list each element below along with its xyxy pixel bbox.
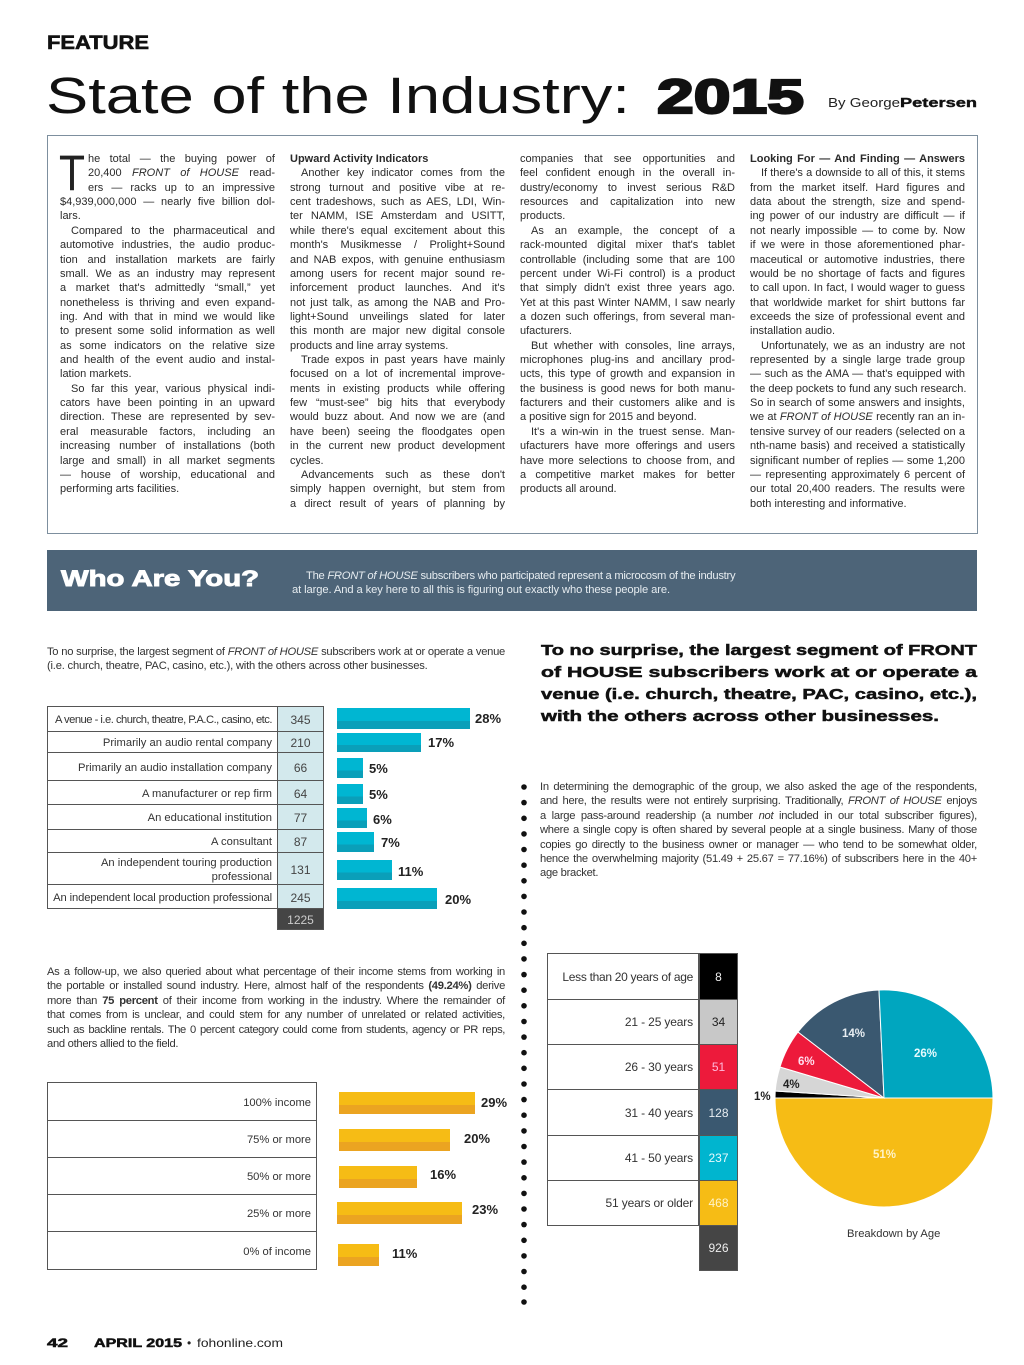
article column 3: products. xyxy=(520,210,565,222)
article column 2: Trade expos in past years have mainly xyxy=(301,354,505,366)
table: subscriber segments: 131 xyxy=(290,862,311,876)
article column 3 xyxy=(520,153,735,495)
article column 3: feel confident enough in the overall in- xyxy=(520,167,735,179)
text: income follow-up: more than 75 percent of their income from working in the industry. Where the remainder of xyxy=(47,995,505,1007)
article column 2: this month are major new digital console xyxy=(290,325,505,337)
table: age: 21 - 25 years xyxy=(625,1015,693,1029)
article column 3: Yet at this past Winter NAMM, I saw nearly xyxy=(520,297,735,309)
pull quote: of HOUSE subscribers work at or operate a xyxy=(541,664,978,681)
article column 2: ter NAMM, ISE Amsterdam and USITT, xyxy=(290,210,505,222)
article column 4: the deep pockets to fund any such research. xyxy=(750,383,966,395)
article column 3: rack-mounted digital mixer that's tablet xyxy=(520,239,735,251)
table: income: 75% or more xyxy=(247,1134,311,1146)
table: age xyxy=(547,953,738,1271)
panel: article text xyxy=(47,135,978,534)
pull quote: with the others across other businesses. xyxy=(540,708,939,725)
article column 3: dustry/economy to invest serious R&D xyxy=(520,182,735,194)
article column 2: among users for recent major sound re- xyxy=(290,268,505,280)
article column 2: cent tradeshows, such as AES, LDI, Win- xyxy=(290,196,505,208)
article column 1: large and small) in all market segments xyxy=(60,455,275,467)
banner heading: Who Are You? xyxy=(61,566,259,591)
article column 2: products and line array systems. xyxy=(290,340,448,352)
article column 1: small. We as an industry may represent xyxy=(60,268,275,280)
article column 4: if we were in those aforementioned phar- xyxy=(750,239,965,251)
footer: fohonline.com xyxy=(197,1336,283,1350)
pie chart caption: Breakdown by Age xyxy=(847,1228,940,1240)
article column 4: nth-name basis) and received a statistically xyxy=(750,440,965,452)
article column 4: installation audio. xyxy=(750,325,835,337)
footer xyxy=(46,1336,283,1350)
article column 2: month's Musikmesse / Prolight+Sound xyxy=(290,239,505,251)
article column 3: the business is good news for both manu- xyxy=(520,383,735,395)
article column 1: — house of worship, educational and xyxy=(60,469,275,481)
text: income follow-up xyxy=(47,966,506,1050)
table: age: 41 - 50 years xyxy=(625,1151,693,1165)
article column 2: would buzz about. And now we are (and xyxy=(290,411,505,423)
article column 2: focused on a lot of incremental improve- xyxy=(290,368,505,380)
intro text xyxy=(47,646,505,672)
pull quote: To no surprise, the largest segment of FRONT xyxy=(541,642,977,659)
title xyxy=(46,67,804,124)
text: income follow-up: such as backline rentals. The 0 percent category could come from students, agency or PR reps, xyxy=(47,1024,505,1036)
article column 4: would be no shortage of facts and figures xyxy=(750,268,965,280)
bar chart: income xyxy=(337,1092,507,1266)
article column 4: from the market itself. Hard figures and xyxy=(750,182,965,194)
article column 4: significant number of replies — some 1,200 xyxy=(750,455,965,467)
table: subscriber segments: 245 xyxy=(290,890,311,904)
bar chart: subscriber segments: 5% xyxy=(369,761,388,776)
article column 4: both interesting and informative. xyxy=(750,498,907,510)
article column 4: If there's a downside to all of this, it stems xyxy=(761,167,965,179)
article column 4: tensive survey of our readers (selected on a xyxy=(750,426,965,438)
article column 1: lars. xyxy=(60,210,81,222)
text: income follow-up: that comes from is unclear, and could stem for any number of unrelated or related activities, xyxy=(47,1009,505,1021)
text: income follow-up: and others allied to the field. xyxy=(47,1038,178,1050)
pull quote xyxy=(540,642,978,725)
article column 1: increasing number of installations (both xyxy=(60,440,275,452)
bar chart: subscriber segments: 6% xyxy=(373,812,392,827)
text: income follow-up: As a follow-up, we also queried about what percentage of their income stems from working in xyxy=(47,966,505,978)
article column 3: a competitive market makes for better xyxy=(520,469,735,481)
table: age: 34 xyxy=(712,1015,725,1029)
table: subscriber segments: A manufacturer or rep firm xyxy=(142,788,272,800)
table: subscriber segments: professional xyxy=(212,870,272,882)
article column 1: as some indicators on the relative size xyxy=(60,340,275,352)
banner text: at large. And a key here to all this is figuring out exactly who these people are. xyxy=(292,584,670,596)
article column 2: a direct result of years of planning by xyxy=(290,498,505,510)
text: demographics: where a single copy is often shared by several people at a single business. Many of those xyxy=(540,824,977,836)
text: demographics: age bracket. xyxy=(540,867,598,879)
text: demographics: and here, the results were not entirely surprising. Traditionally, FRONT of HOUSE enjoys xyxy=(540,795,977,807)
table: subscriber segments: An independent local production professional xyxy=(53,892,272,904)
table: subscriber segments: 87 xyxy=(294,835,307,849)
article column 3: controllable (including some that are 100 xyxy=(520,254,735,266)
byline xyxy=(828,95,977,110)
article column 4: — such as the AMA — that's equipped with xyxy=(750,368,965,380)
article column 2: Upward Activity Indicators xyxy=(290,153,428,165)
bar chart: subscriber segments: 20% xyxy=(445,892,471,907)
table: age: 26 - 30 years xyxy=(625,1060,693,1074)
text: demographics: In determining the demographic of the group, we also asked the age of the respondents, xyxy=(540,781,977,793)
table: subscriber segments: 66 xyxy=(294,760,307,774)
article column 1: Compared to the pharmaceutical and xyxy=(71,225,275,237)
article column 1: and health of the event audio and instal- xyxy=(60,354,275,366)
table: subscriber segments: 77 xyxy=(294,811,307,825)
table: age: 468 xyxy=(708,1196,729,1210)
table: age: Less than 20 years of age xyxy=(562,970,693,984)
intro text: (i.e. church, theatre, PAC, casino, etc.), with the others across other businesses. xyxy=(47,660,428,672)
text: demographics: hence the overwhelming majority (51.49 + 25.67 = 77.16%) of subscribers here in the 40+ xyxy=(540,853,977,865)
text: demographics: a large pass-around readership (a number not included in our total subscriber figures), xyxy=(540,810,977,822)
table: subscriber segments: 210 xyxy=(290,736,311,750)
table: age: 926 xyxy=(708,1241,729,1255)
banner text xyxy=(292,570,736,596)
article column 1: ers — racks up to an impressive xyxy=(88,182,275,194)
article column 3: percent under Wi-Fi control) is a product xyxy=(520,268,735,280)
table: subscriber segments: 1225 xyxy=(287,913,314,927)
bar chart: subscriber segments: 11% xyxy=(398,864,423,879)
table: income: 0% of income xyxy=(243,1246,311,1258)
text: income follow-up: the portable or installed sound industry. Here, almost half of the respondents (49.24%) derive xyxy=(47,980,505,992)
article column 4: Unfortunately, we as an industry are not xyxy=(761,340,965,352)
article column 3: resources and capitalization into new xyxy=(520,196,735,208)
article column 4: exceeds the size of professional event and xyxy=(750,311,965,323)
table: subscriber segments: 64 xyxy=(294,786,307,800)
article column 2: Another key indicator comes from the xyxy=(301,167,505,179)
title: State of the Industry: xyxy=(46,67,630,124)
pie chart: breakdown by age: 26% xyxy=(914,1048,937,1060)
article column 1: $4,939,000,000 — nearly five billion dol- xyxy=(60,196,275,208)
article column 2: inforcement product launches. And it's xyxy=(290,282,505,294)
article column 2: and NAB expos, with genuine enthusiasm xyxy=(290,254,505,266)
bar chart: income: 20% xyxy=(464,1131,490,1146)
article column 3: facturers and their customers alike and is xyxy=(520,397,735,409)
article column 2: simply happen overnight, but stem from xyxy=(290,483,505,495)
bar chart: subscriber segments: 28% xyxy=(475,711,501,726)
table: age: 51 xyxy=(712,1060,725,1074)
article column 1: automotive industries, the audio produc- xyxy=(60,239,275,251)
pie chart: breakdown by age: 14% xyxy=(842,1028,865,1040)
table: subscriber segments: Primarily an audio installation company xyxy=(78,762,272,774)
article column 4: to call upon. In fact, I would wager to guess xyxy=(750,282,965,294)
table: income: 25% or more xyxy=(247,1208,311,1220)
article column 2 xyxy=(290,153,505,510)
article column 1: direction. These are represented by sev- xyxy=(60,411,275,423)
article column 1: ing. And with that in mind we would like xyxy=(60,311,275,323)
byline: Petersen xyxy=(900,95,977,110)
article column 1: So far this year, various physical indi- xyxy=(71,383,275,395)
text: demographics: copies go directly to the business owner or manager — who tend to be somewhat older, xyxy=(540,839,977,851)
article column 3: a dozen such offerings, from several man- xyxy=(520,311,735,323)
footer: • xyxy=(187,1336,191,1350)
article column 4: maceutical or automotive industries, there xyxy=(750,254,965,266)
article column 3: ucts, this type of growth and expansion in xyxy=(520,368,735,380)
article column 1: a market that's admittedly “small,” yet xyxy=(60,282,275,294)
article column 3: have more selections to choose from, and xyxy=(520,455,735,467)
dotted divider xyxy=(521,784,527,1305)
banner: who are you xyxy=(47,550,977,611)
article column 1 xyxy=(60,153,275,495)
title: 2015 xyxy=(657,71,804,124)
article column 1: nonetheless is thriving and even expand- xyxy=(60,297,275,309)
section label: feature: FEATURE xyxy=(47,33,149,54)
article column 4: our total 20,400 readers. The results were xyxy=(750,483,965,495)
table: subscriber segments: A venue - i.e. church, theatre, P.A.C., casino, etc. xyxy=(55,714,272,726)
article column 1: tion and installation markets are fairly xyxy=(60,254,275,266)
article column 3: It's a win-win in the truest sense. Man- xyxy=(531,426,735,438)
table: age: 8 xyxy=(715,970,722,984)
article column 4: we at FRONT of HOUSE recently ran an in- xyxy=(750,411,965,423)
article column 3: microphones plug-ins and ancillary prod- xyxy=(520,354,735,366)
article column 3: ufacturers. xyxy=(520,325,572,337)
article column 2: Advancements such as these don't xyxy=(301,469,505,481)
table: income: 100% income xyxy=(243,1096,311,1108)
bar chart: subscriber segments: 17% xyxy=(428,735,454,750)
article column 2: have been) seeing the floodgates open xyxy=(290,426,505,438)
article column 2: few “must-see” big hits that everybody xyxy=(290,397,505,409)
table: subscriber segments: An educational institution xyxy=(148,812,272,824)
table: subscriber segments: An independent touring production xyxy=(101,856,272,868)
table: income xyxy=(47,1082,317,1270)
article column 2: strong turnout and positive vibe at re- xyxy=(290,182,505,194)
table: subscriber segments xyxy=(47,706,324,930)
article column 3: companies that see opportunities and xyxy=(520,153,735,165)
table: subscriber segments: A consultant xyxy=(211,836,272,848)
article column 2: while there's equal excitement about this xyxy=(290,225,505,237)
pie chart: breakdown by age: 4% xyxy=(783,1079,800,1091)
table: income: 50% or more xyxy=(247,1171,311,1183)
intro text: To no surprise, the largest segment of FRONT of HOUSE subscribers work at or operate a venue xyxy=(47,646,505,658)
table: subscriber segments: 345 xyxy=(290,713,311,727)
text: demographics xyxy=(540,781,977,879)
article column 2: not just talk, as among the NAB and Pro- xyxy=(290,297,505,309)
footer: 42 xyxy=(47,1336,68,1350)
article column 4: not nearly impossible — to come by. Now xyxy=(750,225,965,237)
article column 4: — representing approximately 6 percent of xyxy=(750,469,965,481)
article column 1: to present some solid information as well xyxy=(60,325,275,337)
article column 4: So in search of some answers and insights, xyxy=(750,397,965,409)
bar chart: income: 11% xyxy=(392,1246,417,1261)
byline: By George xyxy=(828,95,900,110)
bar chart: subscriber segments xyxy=(337,708,501,909)
article column 3: As an example, the concept of a xyxy=(531,225,735,237)
bar chart: income: 29% xyxy=(481,1095,507,1110)
table: age: 31 - 40 years xyxy=(625,1106,693,1120)
pie chart: breakdown by age: 1% xyxy=(754,1091,771,1103)
pie chart: breakdown by age xyxy=(754,990,992,1206)
article column 2: light+Sound unveilings slated for later xyxy=(290,311,505,323)
article column 1: lation markets. xyxy=(60,368,132,380)
article column 1: eral measurable factors, including an xyxy=(60,426,275,438)
article column 4: that worldwide market for shirt buttons far xyxy=(750,297,965,309)
table: age: 237 xyxy=(708,1151,729,1165)
banner text: The FRONT of HOUSE subscribers who participated represent a microcosm of the industry xyxy=(306,570,735,582)
article column 2: cycles. xyxy=(290,455,324,467)
table: age: 51 years or older xyxy=(606,1196,693,1210)
article column 4 xyxy=(750,153,966,510)
article column 3: a positive sign for 2015 and beyond. xyxy=(520,411,697,423)
article column 3: But whether with consoles, line arrays, xyxy=(531,340,735,352)
article column 1: cators have been pointing in an upward xyxy=(60,397,275,409)
table: subscriber segments: Primarily an audio rental company xyxy=(103,737,272,749)
article column 4: represented by a single large trade group xyxy=(750,354,965,366)
bar chart: subscriber segments: 5% xyxy=(369,787,388,802)
article column 3: ufacturers have more offerings and users xyxy=(520,440,735,452)
pie chart: breakdown by age: 6% xyxy=(798,1056,815,1068)
bar chart: income: 16% xyxy=(430,1167,456,1182)
article column 3: that simply didn't exist three years ago. xyxy=(520,282,735,294)
pull quote: venue (i.e. church, theatre, PAC, casino, etc.), xyxy=(541,686,977,703)
article column 2: ments in existing products while offering xyxy=(290,383,505,395)
article column 4: data about the strength, size and spend- xyxy=(750,196,965,208)
footer: APRIL 2015 xyxy=(94,1336,182,1350)
bar chart: subscriber segments: 7% xyxy=(381,835,400,850)
article column 1: he total — the buying power of xyxy=(88,153,275,165)
article column 1: performing arts facilities. xyxy=(60,483,179,495)
article column 1: 20,400 FRONT of HOUSE read- xyxy=(88,167,275,179)
article column 3: products all around. xyxy=(520,483,617,495)
article column 4: ing power of our industry are difficult — if xyxy=(750,210,965,222)
article column 4: Looking For — And Finding — Answers xyxy=(750,153,965,165)
table: age: 128 xyxy=(708,1106,729,1120)
bar chart: income: 23% xyxy=(472,1202,498,1217)
article column 2: in the current new product development xyxy=(290,440,505,452)
pie chart: breakdown by age: 51% xyxy=(873,1149,896,1161)
